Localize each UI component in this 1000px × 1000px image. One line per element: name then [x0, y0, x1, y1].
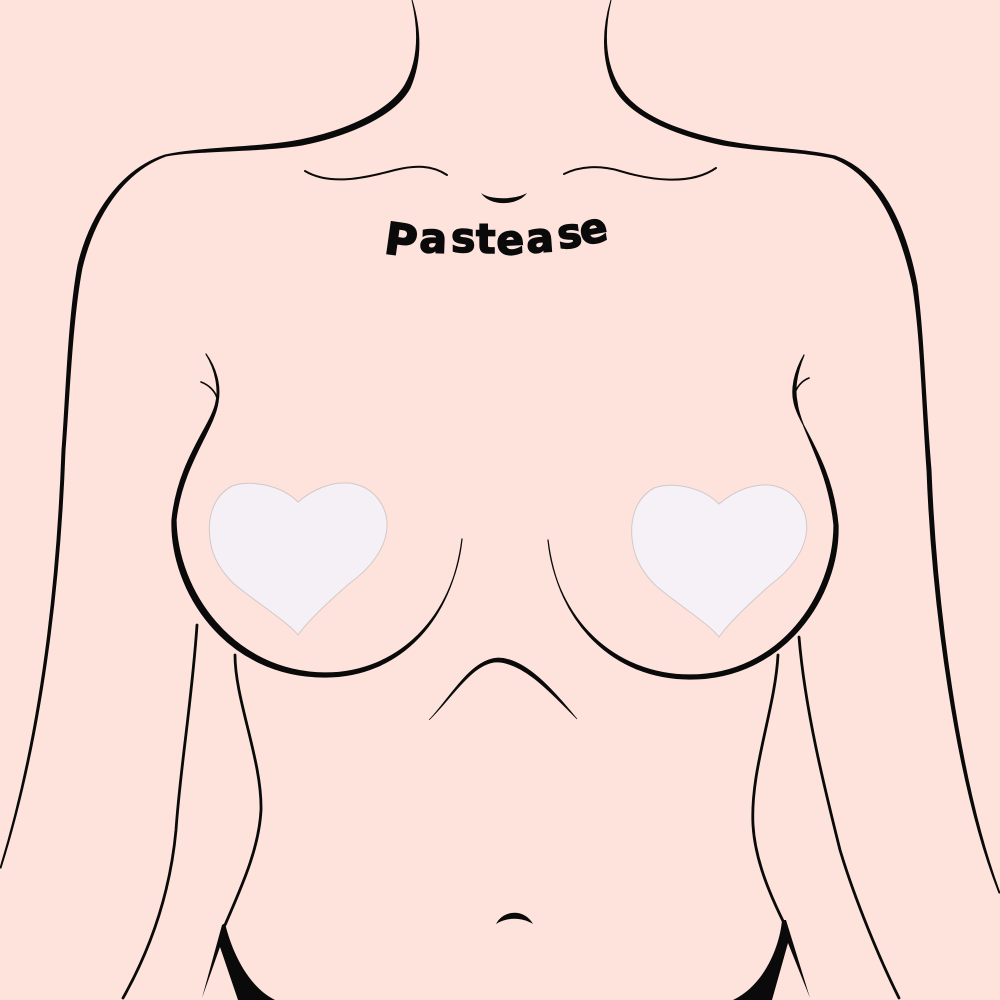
outline: neck notch	[481, 193, 527, 203]
outline: right side curve	[548, 355, 838, 679]
outline: left side curve	[172, 354, 462, 677]
outline: left waist	[225, 655, 261, 925]
garment edge: right	[733, 920, 810, 1000]
outline: left arm inner	[123, 625, 197, 998]
outline: right inner fold	[794, 378, 809, 396]
outline: right arm inner	[799, 637, 899, 998]
outline: right collarbone	[564, 167, 716, 180]
outline: right waist	[753, 655, 785, 925]
garment edge: left	[202, 923, 275, 1000]
outline: left inner fold	[201, 382, 217, 398]
outline: left collarbone	[305, 167, 447, 179]
outline: center rib arc	[429, 658, 577, 720]
heart cover: left	[209, 483, 387, 635]
heart cover: right	[632, 485, 807, 637]
outline: left neck and shoulder	[0, 0, 419, 868]
outline: right neck and shoulder	[605, 0, 1000, 893]
navel	[496, 913, 533, 924]
logo wordmark: Pastease	[381, 203, 611, 268]
